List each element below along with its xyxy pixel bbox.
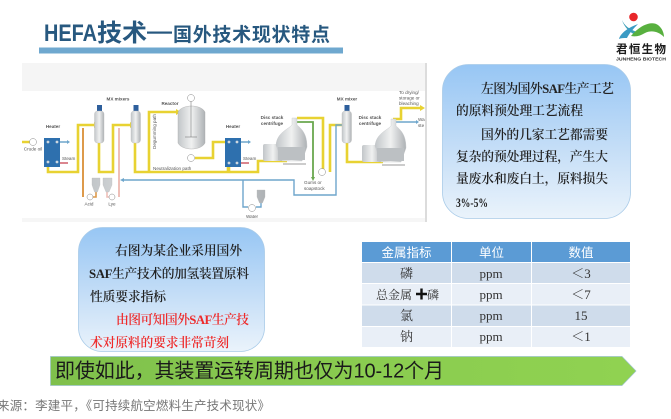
diagram labels: Neutralization path	[153, 166, 192, 171]
logo: Junheng Biotech: JUNHENG BIOTECH	[616, 56, 667, 62]
callout: feedstock requirement: 术对原料的要求非常苛刻	[90, 335, 229, 350]
diagram labels: Acid	[85, 202, 94, 206]
callout: process description: 国外的几家工艺都需要	[481, 127, 608, 142]
table: metal indicators: 数值	[568, 245, 594, 260]
heaters	[44, 138, 60, 167]
diagram labels: Gums or	[304, 180, 322, 185]
icon: logo swooshes	[619, 13, 664, 39]
callout: feedstock requirement: SAF生产技术的加氢装置原料	[89, 266, 249, 281]
table: metal indicators: 磷	[400, 266, 413, 281]
diagram labels: centrifuge	[261, 121, 284, 126]
table: metal indicators: 15	[574, 308, 588, 323]
diagram labels: Reactor	[161, 101, 179, 106]
table: metal indicators: ＜3	[571, 266, 591, 281]
table: metal indicators: 金属指标	[381, 245, 432, 260]
arrow banner: operating cycle	[50, 356, 636, 386]
table: metal indicators: 磷	[427, 287, 439, 302]
diagram labels: To drying/	[399, 90, 420, 95]
diagram labels: storage or	[399, 96, 420, 100]
diagram labels: Heater	[226, 124, 240, 129]
hoppers	[92, 178, 265, 203]
table: metal indicators: ppm	[479, 287, 503, 302]
diagram labels: Degumming path	[152, 114, 157, 149]
table: metal indicators: 氯	[400, 308, 413, 323]
callout: process description: 左图为国外SAF生产工艺	[481, 81, 614, 96]
diagram labels: Disc stack	[359, 115, 382, 120]
reactor	[178, 106, 205, 149]
diagram labels	[24, 90, 425, 219]
callout: feedstock requirement: 由图可知国外SAF生产技	[116, 312, 249, 327]
diagram labels: bleaching	[399, 101, 419, 106]
table: metal indicators: ppm	[479, 329, 503, 344]
diagram labels: ste	[418, 123, 425, 128]
diagram labels: Lye	[108, 202, 116, 206]
diagram labels: Wa	[418, 117, 425, 122]
process flow diagram	[22, 63, 427, 222]
table: metal indicators	[362, 242, 630, 347]
title: HEFA	[44, 20, 97, 47]
table: metal indicators: 钠	[400, 329, 413, 344]
source note: 来源：李建平，《可持续航空燃料生产技术现状》	[0, 398, 270, 413]
table: metal indicators: 总金属	[376, 287, 412, 302]
title: 技术	[97, 20, 147, 47]
centrifuges	[263, 118, 307, 164]
callout: process description: 复杂的预处理过程，产生大	[456, 149, 608, 165]
diagram labels: soapstock	[304, 186, 325, 191]
diagram labels: Water	[246, 214, 259, 219]
diagram labels: MX mixer	[337, 96, 357, 102]
title: 国外技术现状特点	[173, 24, 330, 46]
diagram labels: Heater	[46, 124, 60, 129]
logo: Junheng Biotech: 君恒生物	[616, 42, 666, 56]
pumps	[30, 94, 326, 212]
diagram labels: Disc stack	[261, 115, 284, 120]
mixers	[94, 105, 104, 143]
pipes	[22, 105, 425, 207]
logo: Junheng Biotech	[616, 13, 667, 62]
callout: process description	[442, 64, 630, 218]
table: metal indicators: ppm	[479, 266, 503, 281]
callout: process description: 3%-5%	[456, 195, 488, 210]
table: metal indicators: ＜7	[571, 287, 591, 302]
callout: feedstock requirement: 性质要求指标	[90, 289, 167, 304]
icon: bold plus sign	[416, 288, 427, 300]
diagram labels: Crude oil	[24, 146, 42, 152]
diagram labels: MX mixers	[107, 96, 130, 102]
table: metal indicators: ppm	[479, 308, 503, 323]
diagram labels: Steam	[243, 156, 256, 161]
callout: feedstock requirement	[78, 228, 264, 352]
callout: process description: 量废水和废白土，原料损失	[456, 171, 608, 187]
title	[44, 20, 330, 47]
table: metal indicators: ＜1	[571, 329, 591, 344]
table: metal indicators: 单位	[479, 245, 504, 260]
arrow banner: operating cycle: 即使如此，其装置运转周期也仅为10-12个月	[55, 360, 444, 382]
callout: feedstock requirement: 右图为某企业采用国外	[115, 243, 243, 258]
callout: process description: 的原料预处理工艺流程	[456, 103, 583, 118]
diagram labels: Steam	[62, 156, 75, 161]
diagram labels: centrifuge	[359, 121, 382, 126]
